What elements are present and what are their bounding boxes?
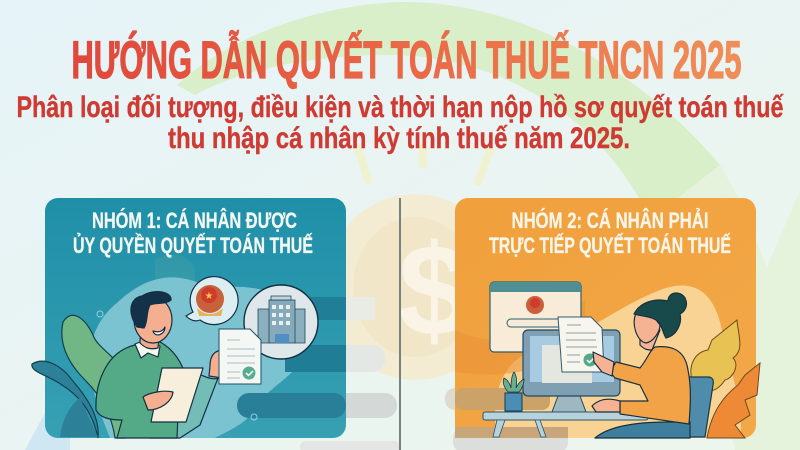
panel 1 heading: ỦY QUYỀN QUYẾT TOÁN THUẾ — [73, 233, 313, 258]
leaves — [691, 320, 760, 438]
plants — [32, 315, 130, 438]
panel: group 2 — [455, 198, 760, 438]
document with check — [219, 329, 261, 384]
subtitle: thu nhập cá nhân kỳ tính thuế năm 2025. — [168, 122, 630, 155]
panel 1 backdrop blob — [90, 277, 307, 438]
panel 2 heading — [489, 208, 731, 258]
panel 1 heading: NHÓM 1: CÁ NHÂN ĐƯỢC — [92, 208, 297, 233]
desk with plant — [483, 372, 648, 437]
panel 2 heading: NHÓM 2: CÁ NHÂN PHẢI — [512, 208, 708, 233]
panel 2 backdrop blob — [495, 286, 741, 438]
speech bubble with emblem: ★ — [205, 291, 214, 302]
subtitle — [16, 91, 784, 155]
computer monitor — [523, 330, 620, 412]
building icon — [244, 285, 318, 359]
document with check, panel 2 — [558, 317, 604, 372]
panel 1 heading — [73, 208, 313, 258]
browser window — [490, 282, 581, 352]
background: $ — [398, 217, 470, 363]
speech bubble with emblem — [186, 277, 238, 325]
chair — [688, 377, 713, 437]
panel: group 1 — [32, 198, 346, 438]
woman — [592, 293, 690, 438]
man — [96, 292, 224, 438]
